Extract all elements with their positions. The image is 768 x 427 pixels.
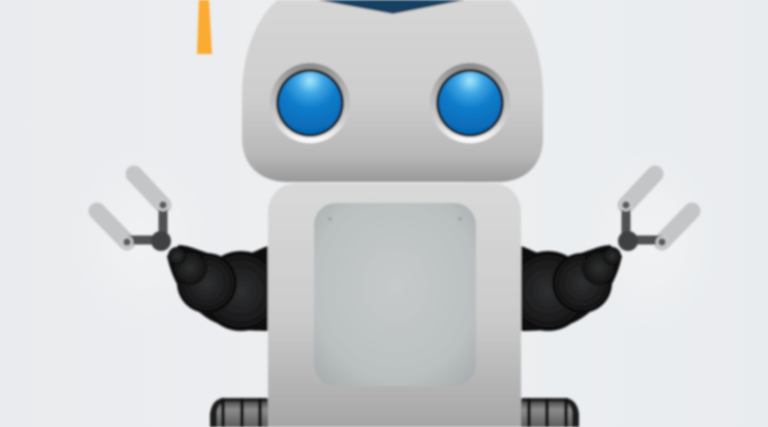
head xyxy=(242,0,543,182)
left eye xyxy=(270,63,350,143)
tassel xyxy=(197,0,212,54)
chest screen xyxy=(314,203,476,386)
right eye xyxy=(430,63,510,143)
robot illustration xyxy=(88,0,702,427)
right wheel xyxy=(521,398,579,427)
left wheel xyxy=(210,398,268,427)
soft light halos xyxy=(70,150,720,330)
left arm and gripper xyxy=(97,174,281,331)
right arm and gripper xyxy=(508,174,692,331)
mortarboard cap xyxy=(318,0,465,14)
body xyxy=(268,183,521,427)
